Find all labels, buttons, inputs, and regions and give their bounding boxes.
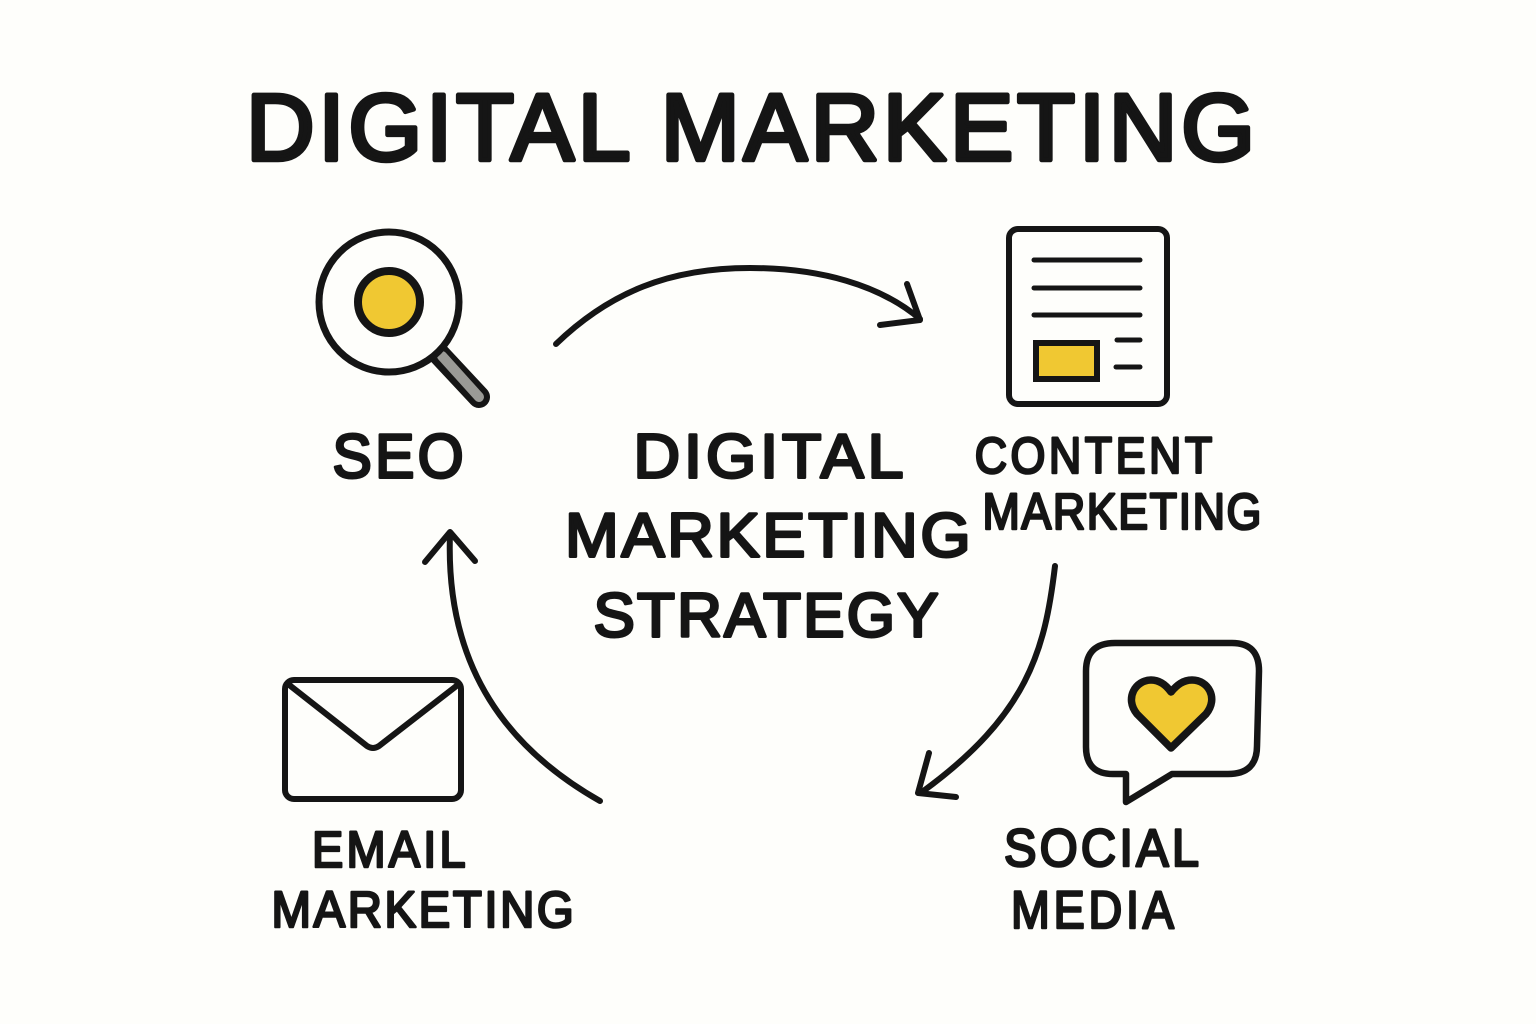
label: email marketing: [272, 822, 574, 938]
icon: magnifying glass (SEO): [319, 232, 479, 397]
label: email marketing: MARKETING: [272, 881, 574, 938]
center label: digital marketing strategy: STRATEGY: [594, 582, 938, 650]
label: SEO: SEO: [332, 421, 464, 491]
label: social media: MEDIA: [1011, 880, 1174, 940]
label: content marketing: MARKETING: [982, 484, 1261, 541]
label: email marketing: EMAIL: [312, 822, 466, 878]
label: social media: [1004, 818, 1199, 940]
center label: digital marketing strategy: MARKETING: [565, 502, 971, 570]
arrow: content marketing to social media: [918, 566, 1055, 797]
center label: digital marketing strategy: DIGITAL: [634, 423, 903, 491]
title: DIGITAL MARKETING: [246, 75, 1255, 181]
label: social media: SOCIAL: [1004, 818, 1199, 877]
icon: envelope (email marketing): [285, 680, 461, 799]
arrow: SEO to content marketing: [556, 268, 920, 344]
label: content marketing: CONTENT: [975, 428, 1212, 485]
label: content marketing: [975, 428, 1261, 541]
icon: document (content marketing): [1009, 229, 1167, 404]
arrow: email marketing to SEO: [425, 532, 600, 801]
center label: digital marketing strategy: [565, 423, 971, 650]
icon: speech bubble with heart (social media): [1086, 643, 1259, 802]
